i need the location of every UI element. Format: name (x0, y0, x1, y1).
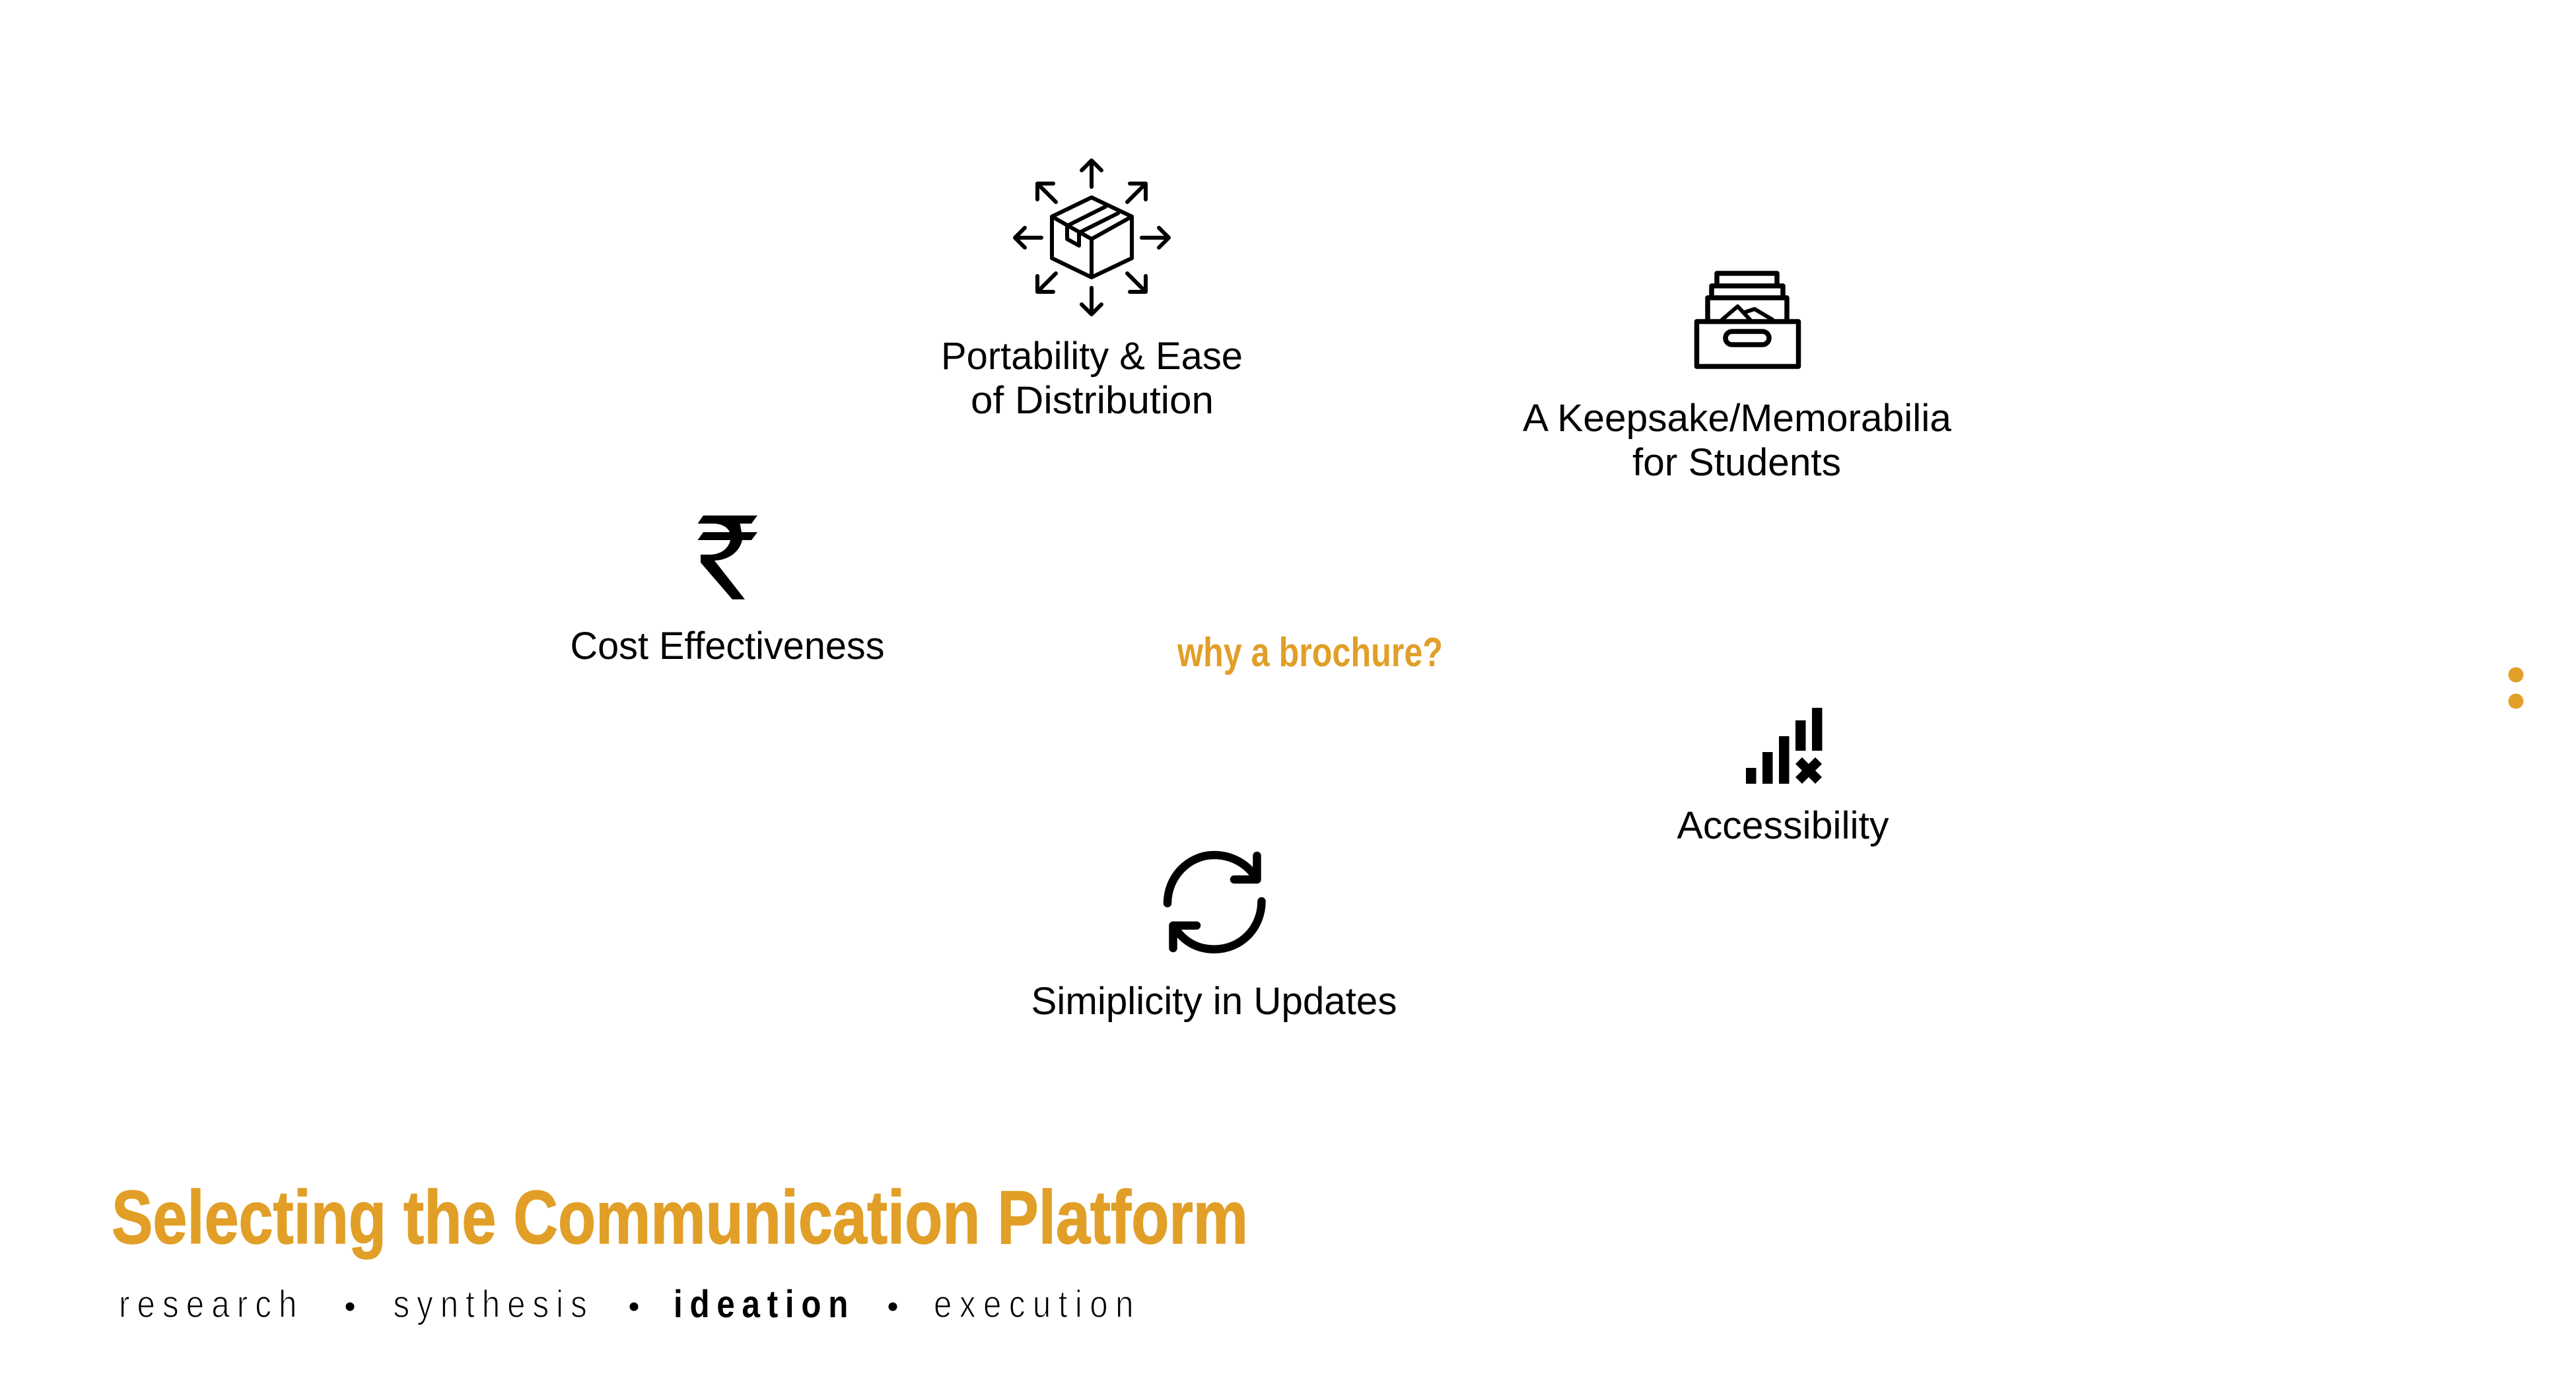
item: keepsake memorabilia for students (1523, 273, 1952, 484)
label: accessibility: Accessibility (1677, 804, 1889, 847)
icon: rupee symbol (697, 516, 757, 600)
item: accessibility (1677, 708, 1889, 847)
label: keepsake line two: for Students (1632, 441, 1841, 484)
label: portability line two: of Distribution (971, 379, 1214, 422)
item: cost effectiveness (571, 516, 885, 668)
item: portability and ease of distribution (941, 160, 1243, 422)
label: keepsake line one: A Keepsake/Memorabilia (1523, 397, 1952, 440)
decorative side dots (2508, 667, 2524, 709)
step: research: research (119, 1283, 296, 1326)
icon: refresh arrows (1167, 855, 1261, 949)
separator dot (889, 1302, 897, 1311)
title: Selecting the Communication Platform (112, 1176, 1248, 1260)
label: cost effectiveness: Cost Effectiveness (571, 625, 885, 668)
label: portability line one: Portability & Ease (941, 335, 1243, 378)
separator dot (346, 1302, 354, 1311)
step: execution: execution (934, 1283, 1134, 1326)
separator dot (630, 1302, 638, 1311)
central question: why a brochure? (1177, 630, 1443, 675)
icon: drawer with cards and photo (1697, 273, 1799, 366)
item: simplicity in updates (1031, 855, 1397, 1023)
icon: box with arrows pointing outward (1015, 160, 1169, 314)
step: ideation, highlighted: ideation (674, 1283, 848, 1326)
icon: signal bars with cross (1746, 708, 1823, 784)
label: simplicity in updates: Simiplicity in Updates (1031, 980, 1397, 1023)
step: synthesis: synthesis (394, 1283, 587, 1326)
process breadcrumb (119, 1283, 1134, 1326)
